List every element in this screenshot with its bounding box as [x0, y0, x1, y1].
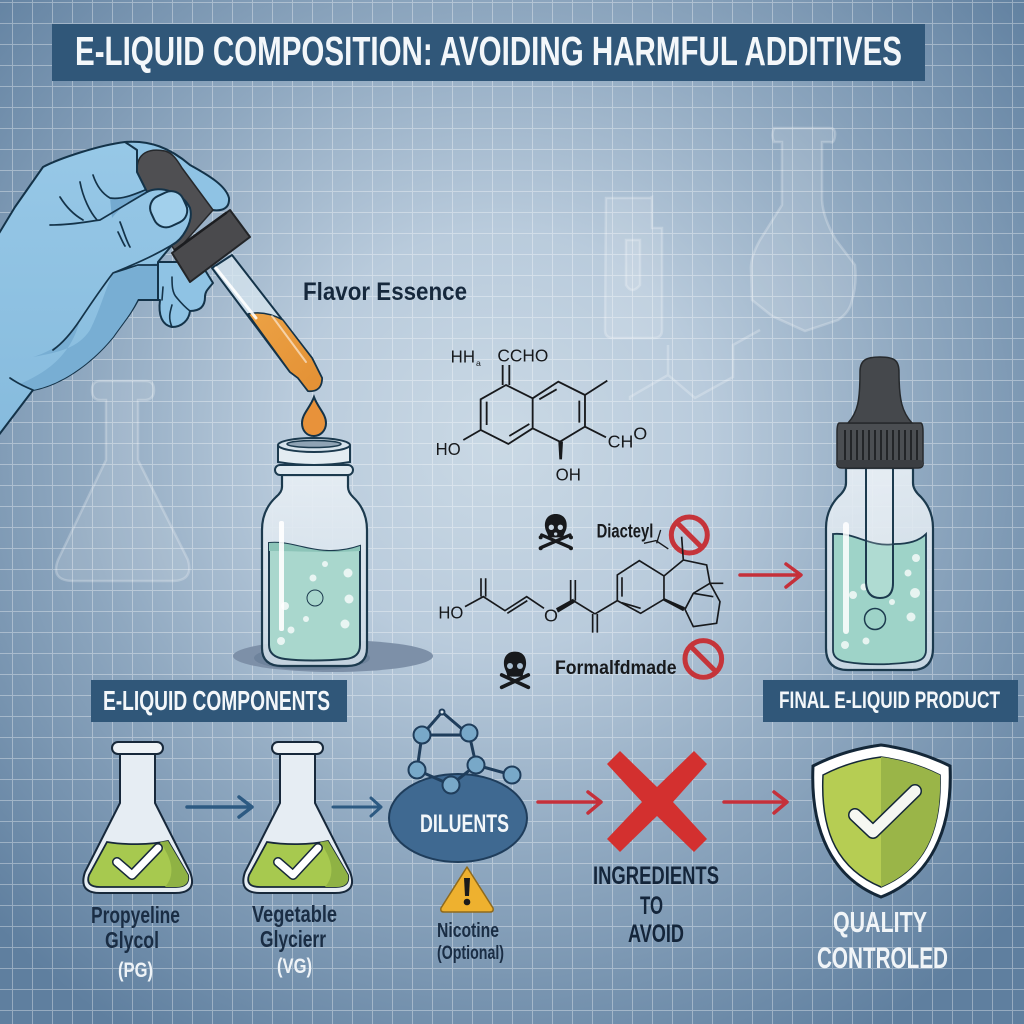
diacteyl label: Diacteyl — [597, 521, 653, 542]
icon: skull — [539, 514, 573, 550]
quality controled label: CONTROLED — [817, 942, 948, 975]
arrow — [724, 792, 787, 813]
propylene glycol label: Glycol — [105, 927, 159, 953]
ingredients to avoid label: TO — [640, 892, 663, 920]
flavor essence label: Flavor Essence — [303, 278, 467, 306]
jar neck and lip — [275, 465, 353, 475]
propylene glycol label: Propyeline — [91, 902, 180, 928]
icon: glove back fingers — [125, 142, 229, 327]
icon: dropper bulb — [137, 150, 213, 252]
top chemical structure: O — [633, 423, 647, 443]
icon: orange drop — [302, 397, 326, 436]
propylene glycol label — [91, 902, 180, 982]
icon: glove palm and thumb — [0, 142, 191, 440]
icon: molecule network — [408, 710, 520, 794]
arrow — [333, 798, 381, 816]
bottom chemical structure — [438, 537, 723, 633]
formalfdmade label: Formalfdmade — [555, 658, 677, 679]
vegetable glycerin label — [252, 901, 337, 978]
mixing jar — [233, 438, 433, 672]
propylene glycol label: (PG) — [118, 959, 153, 982]
arrow — [187, 797, 252, 817]
icon: orange liquid — [248, 313, 322, 391]
icon: prohibition sign — [671, 517, 707, 553]
bottle bulb — [848, 357, 912, 423]
diluents blob with molecule — [389, 710, 527, 862]
bottom chemical structure: HO — [438, 602, 463, 622]
top chemical structure: CCHO — [497, 346, 548, 366]
icon: dropper collar — [172, 210, 250, 282]
icon: skull — [502, 652, 528, 687]
diluents blob with molecule: DILUENTS — [420, 810, 509, 838]
flask: propylene glycol — [83, 742, 192, 893]
top chemical structure: CH — [608, 431, 633, 451]
thumb and crease lines — [10, 175, 172, 390]
top chemical structure: a — [476, 358, 481, 368]
final bottle — [826, 357, 933, 670]
icon: dropper tube — [212, 255, 322, 391]
icon: prohibition sign — [685, 641, 722, 677]
warning: diacetyl — [539, 514, 707, 553]
top chemical structure: HH — [451, 347, 475, 367]
flask: vegetable glycerin — [243, 742, 352, 893]
bottle glass — [826, 468, 933, 670]
top chemical structure — [436, 346, 647, 485]
bottom chemical structure: O — [544, 606, 558, 626]
top chemical structure: HO — [436, 439, 461, 459]
ingredients to avoid label — [593, 862, 719, 948]
ingredients to avoid label: AVOID — [628, 920, 684, 948]
vegetable glycerin label: (VG) — [277, 955, 312, 978]
icon: red cross — [607, 751, 707, 852]
icon: glove shading — [20, 263, 157, 390]
jar glass — [262, 475, 367, 666]
top chemical structure: OH — [556, 465, 581, 485]
pipette — [866, 468, 893, 598]
arrow — [538, 792, 601, 813]
faint background glassware — [56, 128, 856, 581]
vegetable glycerin label: Vegetable — [252, 901, 337, 927]
jar liquid — [269, 543, 360, 660]
bottle cap — [837, 423, 923, 468]
vegetable glycerin label: Glycierr — [260, 926, 326, 952]
gloved hand with dropper — [0, 142, 322, 440]
icon: thumbnail — [146, 187, 191, 232]
e-liquid components label — [91, 680, 347, 722]
nicotine label: (Optional) — [437, 943, 504, 964]
icon: warning triangle — [441, 867, 493, 912]
warning: formaldehyde — [502, 641, 722, 687]
arrow to final product — [740, 564, 801, 587]
jar shadow — [233, 640, 433, 672]
e-liquid components label: E-LIQUID COMPONENTS — [103, 685, 330, 716]
quality controled label — [817, 907, 948, 975]
bottle liquid — [833, 534, 926, 664]
final product label — [763, 680, 1018, 722]
nicotine label — [437, 920, 504, 964]
nicotine label: Nicotine — [437, 920, 499, 942]
icon: quality shield — [813, 745, 950, 897]
quality controled label: QUALITY — [833, 907, 927, 939]
ingredients to avoid label: INGREDIENTS — [593, 862, 719, 890]
